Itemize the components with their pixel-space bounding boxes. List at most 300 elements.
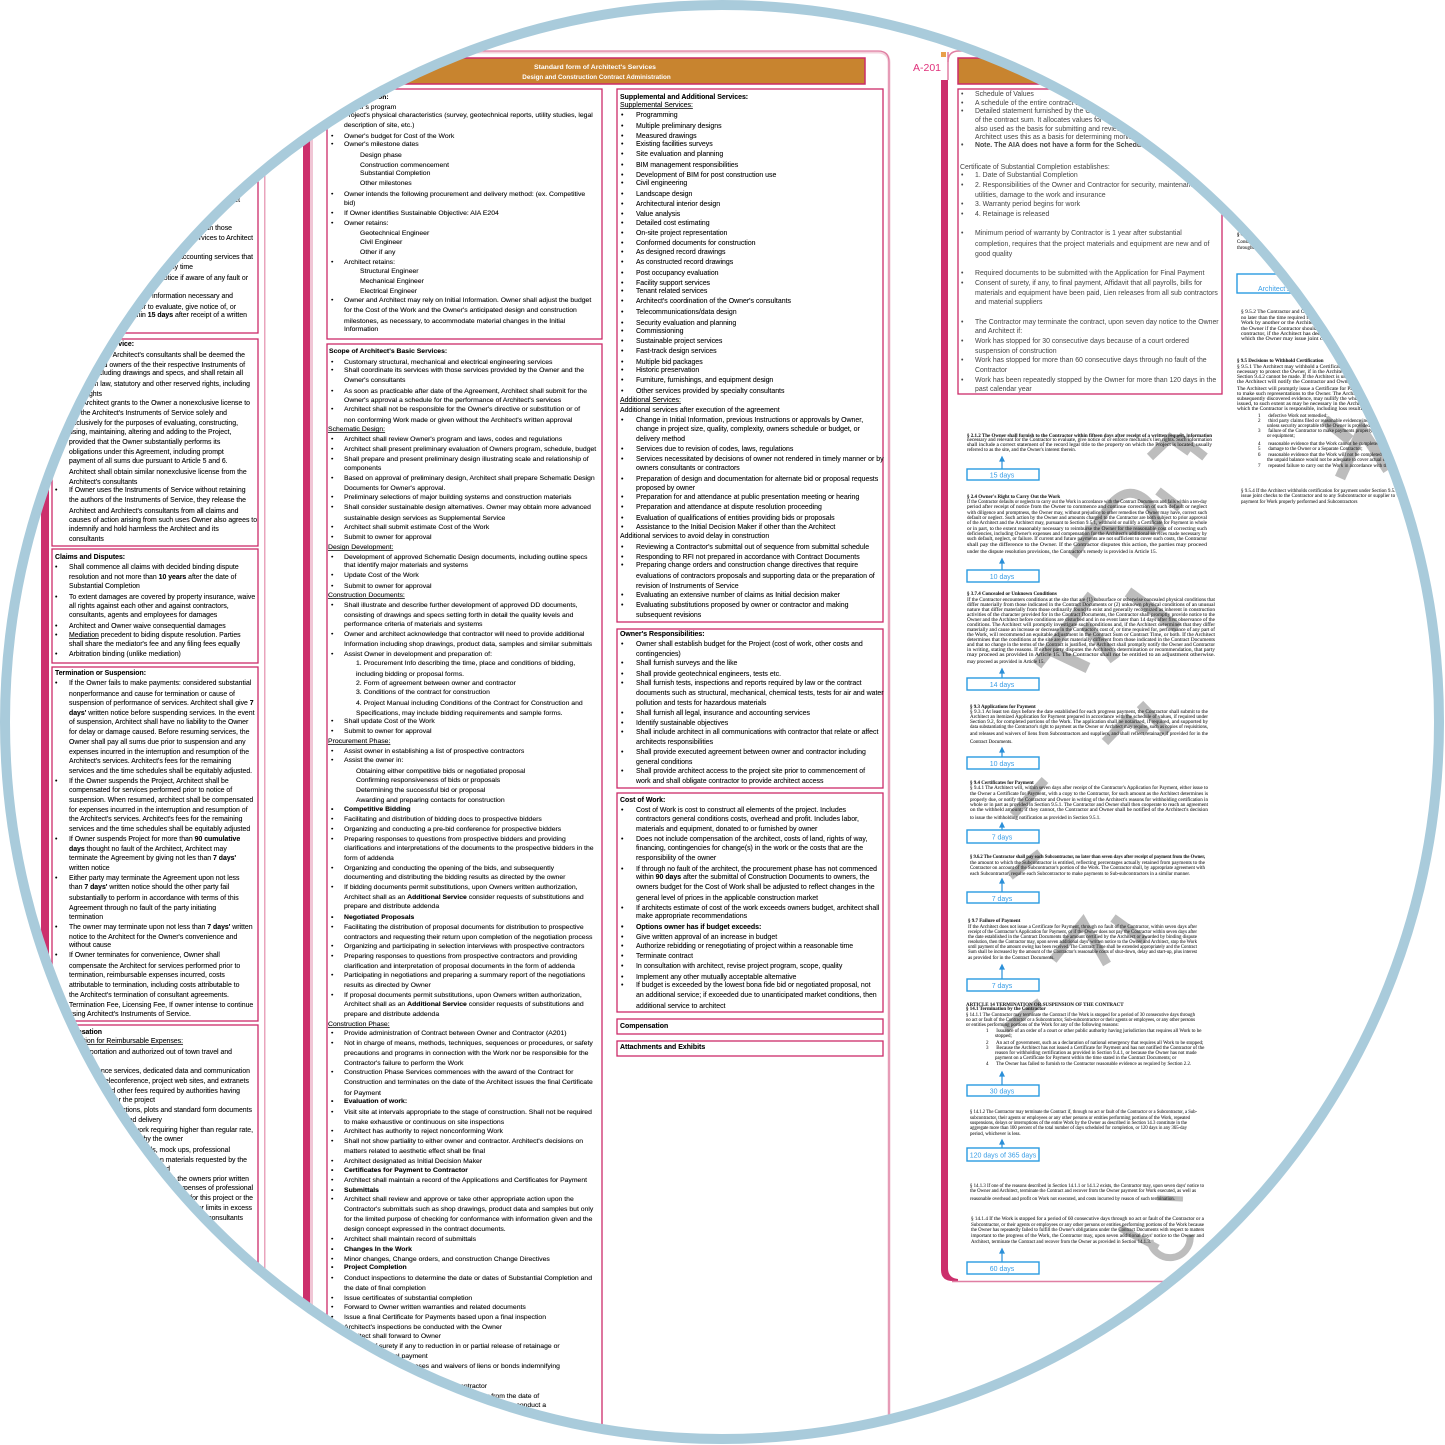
watermark: AIA document marks — [1005, 420, 1388, 1258]
panel: termination or suspension: services and the time schedules shall be equitably adjusted — [69, 826, 250, 833]
clause block: 7 days, subcontractor payments: the amount to which the Subcontractor is entitled, reflecting percentages actually retained from payments to the — [970, 861, 1206, 866]
panel: supplemental and additional services: •Evaluating substitutions proposed by owner or contractor and making — [621, 602, 849, 609]
panel: initial information: Other milestones — [360, 180, 412, 187]
panel: termination or suspension: for delay or damage caused. Before resuming services, the — [69, 729, 250, 736]
panel: termination or suspension: •If the Owner fails to make payments: considered substantial — [55, 680, 252, 687]
panel: supplemental and additional services: •Multiple bid packages — [621, 359, 703, 366]
panel: initial information: Geotechnical Engineer — [360, 230, 430, 237]
clause block: 7 days, certificates for payment: properly due, or notify the Contractor and Owner in writing of the Architect's reasons for withholding certification in — [970, 798, 1208, 803]
panel: supplemental and additional services: •Telecommunications/data design — [621, 309, 737, 316]
far right clauses: 1 defective Work not remedied; — [1258, 414, 1328, 419]
panel: schedule of values and completion notes: Contractor — [975, 367, 1008, 374]
panel: owner's payment obligations (left sheet): Shall provide prompt written notice if aware of any fault or — [73, 275, 249, 282]
panel: scope of architect's basic services: •Conduct inspections to determine the date or dates of Substantial Completion and — [331, 1275, 592, 1282]
panel: supplemental and additional services: Supplemental Services: — [620, 102, 693, 109]
panel: compensation and reimbursable expenses: Expense of overtime work requiring higher than regular rate, — [70, 1127, 253, 1134]
heading: owner's responsibilities: Owner's Responsibilities: — [620, 631, 705, 638]
panel: schedule of values and completion notes: •Work has been repeatedly stopped by the Owner for more than 120 days in the — [961, 377, 1216, 384]
panel: cost of work: within 90 days after the submittal of Construction Documents to owners, the — [635, 874, 869, 881]
panel: termination or suspension: Owner shall pay all sums due prior to suspension and any — [69, 739, 246, 746]
panel: scope of architect's basic services: •If proposal documents permit substitutions, upon Owners written authorization, — [331, 992, 582, 999]
panel: instruments of service: The Architect grants to the Owner a nonexclusive license to — [69, 400, 250, 407]
panel: scope of architect's basic services: •Architect shall present preliminary evaluation of Owners program, schedule, budget — [331, 446, 596, 453]
panel: scope of architect's basic services: clarifications and interpretations of the documents to the prospective bidders in the — [344, 845, 594, 852]
panel: scope of architect's basic services: •Submit to owner for approval — [331, 583, 432, 590]
panel: scope of architect's basic services: Construction Documents: — [328, 592, 405, 599]
heading: compensation: Compensation — [54, 1029, 102, 1036]
panel: supplemental and additional services: •Post occupancy evaluation — [621, 270, 719, 277]
panel: initial information: bid) — [344, 200, 355, 207]
far right clauses: The Architect will promptly issue a Certificate for Payment for the amount for which the Architect is able — [1237, 387, 1445, 392]
panel: supplemental and additional services: evaluations of contractors proposals and supporting data or the preparation of — [636, 573, 875, 580]
panel: initial information: Civil Engineer — [360, 239, 403, 246]
heading: termination or suspension: Termination or Suspension: — [55, 670, 146, 677]
panel: compensation and reimbursable expenses: liability insurance dedicated for this project or the — [104, 1195, 253, 1202]
clause block: 30 days, termination by the contractor: no act or fault of the Contractor or a Subcontractor, Sub-subcontractor or their agents or employees, or any other persons — [966, 1018, 1195, 1023]
panel: compensation and reimbursable expenses: Architect's consultants, with the owners prior written — [91, 1176, 249, 1183]
panel: schedule of values and completion notes: •3. Warranty period begins for work — [961, 201, 1081, 208]
clause block: 10 days, owner's right to carry out the work — [967, 495, 1208, 582]
panel: schedule of values and completion notes: •4. Retainage is released — [961, 211, 1049, 218]
panel: owner's payment obligations (left sheet): Owner shall furnish services of consultants other than those — [50, 225, 232, 232]
panel: scope of architect's basic services: •Customary structural, mechanical and electrical engineering services — [331, 359, 553, 366]
panel: supplemental and additional services: change in project size, quality, complexity, owners schedule or budget, or — [636, 426, 860, 433]
panel: scope of architect's basic services: meeting with Owner to review the facility's performance — [344, 1411, 511, 1418]
panel: termination or suspension: the Architect's services. Architect's fees for the remaining — [69, 816, 243, 823]
panel: termination or suspension: •If Owner suspends Project for more than 90 cumulative — [55, 836, 240, 843]
far right clauses: the unpaid balance would not be adequate to cover actual or liquidated damages; — [1267, 458, 1428, 463]
panel: scope of architect's basic services: •Organizing and conducting the opening of the bids, and subsequently — [331, 865, 555, 872]
panel: scope of architect's basic services: •Issue a final Certificate for Payments based upon a final inspection — [331, 1314, 546, 1321]
panel: termination or suspension: •Either party may terminate the Agreement upon not less — [55, 875, 240, 882]
clause block: 30 days, termination by the contractor: 2 An act of government, such as a declaration of national emergency that requires all Work to be stopped; — [986, 1041, 1203, 1046]
panel: scope of architect's basic services: matters related to aesthetic effect shall be final — [344, 1148, 485, 1155]
panel: scope of architect's basic services: substantial completion. Without additional compensation conduct a — [344, 1402, 546, 1409]
panel: scope of architect's basic services: 2. Form of agreement between owner and contractor — [356, 680, 516, 687]
panel: cost of work: •If budget is exceeded by the lowest bona fide bid or negotiated proposal, not — [621, 982, 871, 989]
clause block: 10 days, owner's right to carry out the work: shall pay the difference to the Owner. If the Contractor disputes this action, the parties may proceed — [967, 543, 1208, 548]
panel: scope of architect's basic services: 4. Project Manual including Conditions of the Contract for Construction and — [356, 700, 583, 707]
panel: initial information: Other if any — [360, 249, 396, 256]
panel: supplemental and additional services: •Change in Initial Information, previous Instructions or approvals by Owner, — [621, 417, 863, 424]
panel: termination or suspension: than 7 days' written notice should the other party fail — [69, 884, 230, 891]
panel: compensation and reimbursable expenses: subsistence — [59, 1058, 95, 1065]
panel: schedule of values and completion notes: •A schedule of the entire contract sum allocated among the parts of the Work — [961, 100, 1207, 107]
panel: schedule of values and completion notes: of the contract sum. It allocates values for the various parts of the Work and is — [975, 117, 1213, 124]
clause block: 14 days, concealed or unknown conditions: and that no change in the terms of the Contract is justified, the Architect shall promptly notify the Owner and Contractor — [967, 643, 1215, 648]
clause block: 15 days: § 2.1.2 The Owner shall furnish to the Contractor within fifteen days after receipt of a written request, information — [967, 434, 1212, 439]
panel: scope of architect's basic services: •Facilitating the distribution of proposal documents for distribution to prospective — [331, 924, 584, 931]
panel: supplemental and additional services: •Civil engineering — [621, 180, 687, 187]
panel: claims and disputes: resolution and not more than 10 years after the date of — [69, 574, 237, 581]
clause block: 14 days, concealed or unknown conditions: determines that the conditions at the site are not materially different from those indicated in the Contract Documents — [967, 638, 1215, 643]
heading: supplemental and additional services: Supplemental and Additional Services: — [620, 94, 748, 101]
far right clauses: subsequently discovered evidence, may nullify the whole or a part of a Certificate for Payment previously — [1237, 397, 1445, 402]
panel: scope of architect's basic services: •Preparing responses to questions from prospective contractors and providing — [331, 953, 577, 960]
panel: supplemental and additional services: •Historic preservation — [621, 367, 699, 374]
clause block: 30 days, termination by the contractor: 1 Issuance of an order of a court or other public authority having jurisdiction that requires all Work to be — [986, 1029, 1202, 1034]
panel: instruments of service: exclusively for the purposes of evaluating, constructing, — [69, 420, 238, 427]
duration box: 7 days — [967, 965, 1039, 991]
panel: owner's payment obligations (left sheet): designated or authorize Architect to furnish services to Architect — [59, 235, 253, 242]
panel: owner's responsibilities: •Identify sustainable objectives — [621, 720, 729, 727]
duration box: 14 days: 14 days — [990, 682, 1015, 689]
panel: supplemental and additional services: •Fast-track design services — [621, 348, 717, 355]
panel: owner's payment obligations (left sheet) — [125, 181, 259, 334]
panel: instruments of service: •If Owner uses the Instruments of Service without retaining — [55, 487, 246, 494]
panel: scope of architect's basic services: •Provide administration of Contract between Owner and Contractor (A201) — [331, 1030, 567, 1037]
panel: compensation and reimbursable expenses: services, teleconference, project web sites, and extranets — [74, 1078, 250, 1085]
panel: supplemental and additional services: •Landscape design — [621, 191, 692, 198]
panel: scope of architect's basic services: •If bidding documents permit substitutions, upon Owners written authorization, — [331, 884, 578, 891]
clause block: 30 days, termination by the contractor: § 14.1.1 The Contractor may terminate the Contract if the Work is stopped for a period of 30 consecutive days through — [966, 1013, 1195, 1018]
panel: initial information: •Owner and Architect may rely on Initial Information. Owner shall adjust the budget — [331, 297, 591, 304]
clause block: 10 days, applications for payment — [967, 705, 1209, 769]
panel: compensation: Compensation — [620, 1023, 668, 1030]
clause block: 10 days, applications for payment: Section 9.2, for completed portions of the Work. The application shall be notarized, if required, and supported by — [970, 720, 1209, 725]
clause block: 14 days, concealed or unknown conditions: may proceed as provided in Article 15. — [967, 660, 1045, 665]
far right clauses: to make such representations to the Owner. The Architect may also withhold a Certificate for Payment or — [1237, 392, 1445, 397]
clause block: 30 days, termination by the contractor: 4 The Owner has failed to furnish to the Contractor reasonable evidence as required by Section 2.2. — [986, 1062, 1191, 1067]
panel: scope of architect's basic services: •Affidavits, receipts, releases and waivers of liens or bonds indemnifying — [331, 1363, 560, 1370]
panel: cost of work: responsibility of the owner — [636, 855, 717, 862]
panel: scope of architect's basic services: 3. Conditions of the contract for construction — [356, 689, 490, 696]
panel: attachments and exhibits — [617, 1041, 883, 1056]
clause block: 30 days, termination by the contractor: reason for withholding certification as provided in Section 9.4.1, or because the Owner has not made — [995, 1051, 1197, 1056]
clause block: seven days' notice: reasonable overhead and profit on Work not executed, and costs incurred by reason of such termination. — [970, 1197, 1175, 1202]
panel: termination or suspension: Architect's services. Architect's fees for the remaining — [69, 758, 231, 765]
clause block: 14 days, concealed or unknown conditions: may proceed as provided in Article 15. The Contractor shall not be entitled to an adjustment otherwise. — [967, 653, 1215, 658]
panel: schedule of values and completion notes: •Required documents to be submitted with the Application for Final Payment — [961, 270, 1205, 277]
panel: claims and disputes: •Arbitration binding (unlike mediation) — [55, 651, 181, 658]
panel: instruments of service: indemnify and hold harmless the Architect and its — [69, 526, 219, 533]
clause block: 120 days of 365 days: period, whichever is less. — [970, 1132, 1021, 1137]
panel: supplemental and additional services: •Programming — [621, 112, 678, 119]
panel: scope of architect's basic services: precautions and programs in connection with the Work nor be responsible for the — [344, 1050, 589, 1057]
panel: scope of architect's basic services: •Architect shall forward to Owner — [331, 1333, 442, 1340]
panel: compensation and reimbursable expenses: approval; Architect's expenses of professional — [113, 1185, 253, 1192]
panel: scope of architect's basic services: •Submittals — [331, 1187, 379, 1194]
header: A-201 sheet — [957, 57, 1040, 85]
panel: cost of work: •If architects estimate of cost of the work exceeds owners budget, architect shall — [621, 905, 880, 912]
panel: instruments of service: copyrights — [71, 391, 103, 398]
panel: scope of architect's basic services: Contractor's submittals such as shop drawings, product data and samples but only — [344, 1206, 594, 1213]
panel: scope of architect's basic services: •Evaluation of work: — [331, 1098, 407, 1105]
panel: scope of architect's basic services: components — [344, 465, 382, 472]
panel: owner's payment obligations (left sheet): enforce lien rights within 15 days after receipt of a written — [72, 312, 247, 319]
panel: scope of architect's basic services: Procurement Phase: — [328, 738, 390, 745]
clause block: 7 days, failure of payment: If the Architect does not issue a Certificate for Payment, through no fault of the Contractor, within seven days after — [968, 925, 1197, 930]
panel: scope of architect's basic services: •Preliminary selections of major building systems and construction materials — [331, 494, 572, 501]
panel: scope of architect's basic services: •Shall update Cost of the Work — [331, 718, 435, 725]
panel: supplemental and additional services: •Architectural interior design — [621, 201, 720, 208]
panel: supplemental and additional services — [617, 89, 884, 622]
panel: compensation and reimbursable expenses: Long distance services, dedicated data and communication — [69, 1068, 250, 1075]
clause block: 15 days — [967, 434, 1213, 480]
panel: instruments of service: consultants — [69, 536, 104, 543]
clause block: 7 days, certificates for payment: § 9.4 Certificates for Payment — [970, 781, 1034, 786]
panel: supplemental and additional services: •Existing facilities surveys — [621, 141, 713, 148]
panel: scope of architect's basic services: •Owner shall give notice within a period of 1 year from the date of — [331, 1393, 539, 1400]
panel: scope of architect's basic services: Owner's consultants — [344, 377, 406, 384]
panel: owner's responsibilities: architects responsibilities — [636, 739, 714, 746]
panel: claims and disputes: Substantial Completion — [69, 583, 140, 590]
panel: termination or suspension: terminate the Agreement by giving not les than 7 days' — [69, 855, 236, 862]
panel: owner's responsibilities: •Shall furnish all legal, insurance and accounting services — [621, 710, 810, 717]
panel: initial information: Design phase — [360, 152, 402, 159]
panel: compensation and reimbursable expenses: if authorized in advance by the owner — [69, 1136, 184, 1143]
panel: initial information: Mechanical Engineer — [360, 278, 425, 285]
panel: supplemental and additional services: •As designed record drawings — [621, 249, 726, 256]
panel: scope of architect's basic services: •Project Completion — [331, 1264, 407, 1271]
panel: initial information: Information — [344, 326, 378, 333]
panel: supplemental and additional services: •Security evaluation and planning — [621, 320, 736, 327]
panel: termination or suspension: suspension. When resumed, architect shall be compensated — [69, 797, 253, 804]
panel: supplemental and additional services: proposed by owner — [636, 485, 696, 492]
clause block: 14 days, concealed or unknown conditions: in writing, stating the reasons. If either party disputes the Architect's determination or recommendation, that party — [967, 648, 1216, 653]
panel: initial information: Structural Engineer — [360, 268, 419, 275]
panel: attachments and exhibits: Attachments and Exhibits — [620, 1044, 705, 1051]
panel: supplemental and additional services: •On-site project representation — [621, 230, 728, 237]
clause block: 10 days, applications for payment: § 9.3 Applications for Payment — [970, 705, 1036, 710]
clause block: 7 days, failure of payment: as provided for in the Contract Documents. — [968, 956, 1055, 961]
panel: scope of architect's basic services: •Development of approved Schematic Design documents, including outline specs — [331, 554, 588, 561]
far right clauses: necessary to protect the Owner, if in the Architect's opinion the representations to the Owner required by — [1237, 370, 1445, 375]
panel: cost of work: additional service to architect — [636, 1003, 726, 1010]
panel: initial information: Electrical Engineer — [360, 288, 418, 295]
panel: scope of architect's basic services: for Payment — [344, 1090, 381, 1097]
panel: termination or suspension: days' written notice before suspending services. In the event — [69, 710, 255, 717]
clause block: 120 days of 365 days — [967, 1110, 1197, 1161]
far right clauses: Work by another or the Architect's Certificate for Payment with respect to the remaining portions of — [1241, 321, 1445, 326]
clause block: 60 days, work stopped — [967, 1217, 1205, 1274]
clause block: 7 days, certificates for payment: to issue the withholding notification as provided in Section 9.5.1. — [970, 816, 1101, 821]
panel: scope of architect's basic services: •Minor changes, Change orders, and construction Change Directives — [331, 1256, 550, 1263]
panel: scope of architect's basic services: Specifications, may include bidding requirements and sample forms. — [356, 710, 563, 717]
panel: instruments of service — [46, 339, 258, 546]
panel: termination or suspension: substantially to perform in accordance with terms of this — [69, 895, 239, 902]
panel: initial information: Substantial Completion — [360, 170, 431, 177]
clause block: 10 days, owner's right to carry out the work: § 2.4 Owner's Right to Carry Out the Work — [967, 495, 1060, 500]
header: Standard form of Architect's Services — [404, 57, 866, 85]
far right clauses: payment for Work properly performed and Subcontractors — [1241, 500, 1357, 505]
panel: owner's responsibilities: contingencies) — [636, 651, 681, 658]
panel: scope of architect's basic services: •Architect shall review Owner's program and laws, codes and regulations — [331, 436, 563, 443]
panel: scope of architect's basic services: •Submit to owner for approval — [331, 534, 432, 541]
clause block: 7 days, failure of payment — [967, 919, 1198, 991]
far right clauses: which the Owner may issue joint checks and pay directly to the Contractor any retainage then due — [1241, 337, 1445, 342]
clause block: 30 days, termination by the contractor: or entities performing portions of the Work for any of the following reasons: — [966, 1023, 1119, 1028]
clause block: 10 days, applications for payment: § 9.3.1 At least ten days before the date established for each progress payment, the Contractor shall submit to the — [970, 710, 1209, 715]
clause block: 7 days, subcontractor payments: § 9.6.2 The Contractor shall pay each Subcontractor, no later than seven days after receipt of payment from the Owner, — [970, 855, 1206, 860]
panel: termination or suspension: nonperformance and cause for termination or cause of — [69, 691, 235, 698]
panel: supplemental and additional services: •Facility support services — [621, 280, 711, 287]
panel: scope of architect's basic services: •Preparing responses to questions from prospective bidders and providing — [331, 836, 566, 843]
panel: termination or suspension: Termination Fee, Licensing Fee, If owner intense to continue — [69, 1002, 253, 1009]
far right clauses: contractor, if the Architect has decided to withhold or nullify a Certificate for Payment as a result of — [1241, 332, 1445, 337]
panel: compensation and reimbursable expenses: Renderings, models, mock ups, professional — [94, 1147, 230, 1154]
clause block: 14 days, concealed or unknown conditions: the Work, will recommend an equitable adjustment in the Contract Sum or Contract Time, or both. If the Architect — [967, 633, 1216, 638]
panel: scope of architect's basic services: consisting of drawings and specs setting forth in detail the quality levels and — [344, 612, 574, 619]
panel: scope of architect's basic services: Information including shop drawings, product data, samples and similar submittals — [344, 641, 593, 648]
panel: cost of work: financing, contingencies for change(s) in the work or the costs that are the — [636, 845, 863, 852]
panel: scope of architect's basic services: •Organizing and conducting a pre-bid conference for prospective bidders — [331, 826, 562, 833]
panel: scope of architect's basic services: •Shall illustrate and describe further development of approved DD documents, — [331, 602, 578, 609]
clause block: 14 days, concealed or unknown conditions — [967, 592, 1216, 690]
panel: scope of architect's basic services: •Construction Phase Services commences with the award of the Contract for — [331, 1069, 574, 1076]
clause block: 7 days, certificates for payment — [967, 781, 1209, 843]
panel: cost of work: •In consultation with architect, revise project program, scope, quality — [621, 963, 843, 970]
clause block: 10 days, owner's right to carry out the work: If the Contractor defaults or neglects to carry out the Work in accordance with the Contract Documents and fails within a ten-day — [967, 500, 1207, 505]
panel: schedule of values and completion notes: past calendar year — [975, 386, 1032, 393]
clause block: 60 days, work stopped: § 14.1.4 If the Work is stopped for a period of 60 consecutive days through no act or fault of the Contractor or a — [971, 1217, 1205, 1222]
clause block: 7 days, subcontractor payments — [967, 855, 1206, 903]
panel: cost of work: •Authorize rebidding or renegotiating of project within a reasonable time — [621, 943, 853, 950]
panel: initial information: milestones, as necessary, to accommodate material changes in the Initial — [344, 318, 566, 325]
panel: scope of architect's basic services: •Issue certificates of substantial completion — [331, 1295, 472, 1302]
panel: scope of architect's basic services: results as directed by Owner — [344, 982, 431, 989]
clause block: seven days' notice: the Owner and Architect, terminate the Contract and recover from the Owner payment for Work executed, as well as — [970, 1189, 1196, 1194]
panel: scope of architect's basic services: Contractor's failure to perform the Work — [344, 1060, 464, 1067]
clause block: 10 days, owner's right to carry out the work: such default, neglect, or failure. If current and future payments are not sufficient to cover such costs, the Contractor — [967, 537, 1207, 542]
clause block: 7 days, certificates for payment: on the withheld amount; if they cannot, the Contractor and Owner shall be notified of the Architect's decision — [970, 808, 1209, 813]
panel: schedule of values and completion notes: also used as the basis for submitting and reviewing progress payments. The — [975, 126, 1207, 133]
clause block: 7 days, certificates for payment: the Owner a Certificate for Payment, with a copy to the Contractor, for such amount as the Architect determines is — [970, 792, 1208, 797]
panel: scope of architect's basic services: contractors and requesting their return upon completion of the negotiation process — [344, 934, 593, 941]
panel: supplemental and additional services: subsequent revisions — [636, 612, 702, 619]
panel: supplemental and additional services: •As constructed record drawings — [621, 259, 734, 266]
panel: owner's responsibilities: •Shall include architect in all communications with contractor that relate or affect — [621, 729, 878, 736]
panel: initial information: •Owner's milestone dates — [331, 141, 419, 148]
duration box: 30 days: 30 days — [990, 1088, 1015, 1096]
panel: initial information: •Owner retains: — [331, 220, 389, 227]
panel: initial information: •Architect retains: — [331, 259, 395, 266]
panel: termination or suspension: compensate the Architect for services performed prior to — [69, 963, 240, 970]
clause block: 120 days of 365 days: subcontractor, their agents or employees or any other persons or entities performing portions of the Work, repeated — [970, 1116, 1190, 1121]
clause block: 60 days, work stopped: the Owner has repeatedly failed to fulfill the Owner's obligations under the Contract Documents with respect to matters — [971, 1228, 1204, 1233]
panel: compensation and reimbursable expenses — [77, 1024, 259, 1263]
clause block: 10 days, owner's right to carry out the work: deficiencies, including Owner's expenses and compensation for the Architect's additional services made necessary by — [967, 532, 1208, 537]
clause block: 120 days of 365 days: aggregate more than 100 percent of the total number of days scheduled for completion, or 120 days in any 365-day — [970, 1126, 1187, 1131]
panel: supplemental and additional services: •Preparing change orders and construction change directives that require — [621, 562, 858, 569]
far right clauses: 7 repeated failure to carry out the Work in accordance with the Contract Documents. — [1258, 464, 1433, 469]
clause block: 10 days, owner's right to carry out the work: under the dispute resolution provisions, the Contractor's remedy is provided in Article 15. — [967, 550, 1157, 555]
panel: scope of architect's basic services: •Shall not show partiality to either owner and contractor. Architect's decisions on — [331, 1138, 583, 1145]
clause block: 120 days of 365 days: suspensions, delays or interruptions of the entire Work by the Owner as described in Section 14.3 constitute in the — [970, 1121, 1188, 1126]
panel: initial information: •If Owner identifies Sustainable Objective: AIA E204 — [331, 210, 499, 217]
panel: scope of architect's basic services: •Assist the owner in: — [331, 757, 403, 764]
panel: scope of architect's basic services: Documents for Owner's approval. — [344, 485, 445, 492]
clause block: 7 days, subcontractor payments: Contractor on account of the Subcontractor's portion of the Work. The Contractor shall, by appropriate agreement with — [970, 866, 1205, 871]
clause block: 30 days, termination by the contractor — [966, 1003, 1205, 1096]
duration box: 7 days: 7 days — [992, 896, 1013, 903]
panel: termination or suspension: for expenses incurred in the interruption and resumption of — [69, 807, 248, 814]
panel: supplemental and additional services: •Conformed documents for construction — [621, 240, 756, 247]
panel: initial information: description of site, etc.) — [344, 122, 414, 129]
clause block: 7 days, subcontractor payments: each Subcontractor, require each Subcontractor to make payments to Sub-subcontractors in a similar manner. — [970, 872, 1190, 877]
panel: supplemental and additional services: •Detailed cost estimating — [621, 220, 710, 227]
panel: supplemental and additional services: •Preparation of design and documentation for alternate bid or proposal requests — [621, 476, 879, 483]
panel: scope of architect's basic services: •Architect's inspections be conducted with the Owner — [331, 1324, 503, 1331]
panel: supplemental and additional services: •BIM management responsibilities — [621, 162, 739, 169]
clause block: 10 days, owner's right to carry out the work: period after receipt of notice from the Owner to commence and continue correction of such default or neglect — [967, 505, 1208, 510]
panel: scope of architect's basic services: •Facilitating and distribution of bidding docs to prospective bidders — [331, 816, 542, 823]
far right clauses: the Architect will notify the Contractor and Owner as provided in Section 9.4.1. If the Contractor and — [1237, 380, 1445, 385]
panel: termination or suspension: without cause — [68, 942, 111, 949]
panel: owner's responsibilities: documents such as structural, mechanical, chemical tests, tests for air and water — [636, 690, 884, 697]
clause block: 14 days, concealed or unknown conditions: materially and cause an increase or decrease in the Contractor's cost of, or time required for, performance of any part of — [967, 628, 1215, 633]
panel: compensation — [617, 1019, 883, 1034]
panel: scope of architect's basic services: •Certificates for Payment to Contractor — [331, 1167, 468, 1174]
panel: supplemental and additional services: •Architect's coordination of the Owner's consultants — [621, 298, 791, 305]
panel: supplemental and additional services: •Site evaluation and planning — [621, 151, 723, 158]
panel: scope of architect's basic services: •As soon as practicable after date of the Agreement, Architect shall submit for the — [331, 388, 587, 395]
panel: supplemental and additional services: •Measured drawings — [621, 133, 697, 140]
panel: scope of architect's basic services: •Owner and architect acknowledge that contractor will need to provide additional — [331, 631, 585, 638]
far right clauses: issued, to such extent as may be necessary in the Architect's opinion to protect the Owner from loss for — [1237, 402, 1445, 407]
panel: compensation and reimbursable expenses: jurisdiction over the project — [72, 1097, 155, 1104]
panel: scope of architect's basic services: Design Development: — [328, 544, 394, 551]
panel: cost of work: •If through no fault of the architect, the procurement phase has not commenced — [621, 866, 877, 873]
panel: scope of architect's basic services: Owner's approval a schedule for the performance of Architect's services — [344, 397, 562, 404]
panel: compensation and reimbursable expenses: Printing, reproductions, plots and standard form documents — [71, 1107, 253, 1114]
panel: claims and disputes: • Mediation precedent to biding dispute resolution. Parties — [55, 632, 241, 639]
panel: initial information: •Owner's program — [331, 104, 397, 111]
panel: schedule of values and completion notes: •Consent of surety, if any, to final payment, Affidavit that all payrolls, bills for — [961, 280, 1203, 287]
panel: owner's payment obligations (left sheet): those services which the Owner requires of Architect as set — [60, 197, 240, 204]
clause block: seven days' notice: § 14.1.3 If one of the reasons described in Section 14.1.1 or 14.1.2 exists, the Contractor may, upon seven days' notice to — [970, 1184, 1204, 1189]
panel: scope of architect's basic services — [327, 344, 602, 1445]
clause block: 10 days, applications for payment: and releases and waivers of liens from Subcontractors and suppliers, and shall reflect retainage if provided for in the — [970, 732, 1209, 737]
panel: scope of architect's basic services: Schematic Design: — [328, 426, 385, 433]
panel: owner's responsibilities — [617, 629, 884, 788]
page frame: A-201 sheet — [941, 50, 1164, 1282]
far right clauses: § 4.2 — [1237, 233, 1248, 238]
panel: scope of architect's basic services: •Architect has authority to reject nonconforming Work — [331, 1128, 503, 1135]
clause block: 10 days, applications for payment: Contract Documents. — [970, 740, 1012, 745]
panel: supplemental and additional services: •Preparation for and attendance at public presentation meeting or hearing — [621, 494, 859, 501]
panel: compensation and reimbursable expenses: owner or required — [116, 1166, 170, 1173]
panel: scope of architect's basic services: documenting and distributing the bidding results as directed by the owner — [344, 874, 566, 881]
clause block: 7 days, failure of payment: the date established in the Contract Documents the amount certified by the Architect or awarded by binding dispute — [968, 935, 1198, 940]
panel: schedule of values and completion notes — [958, 89, 1222, 394]
duration box: monthly, architect: Architect's Certificate for Payment — [1258, 286, 1363, 293]
panel: supplemental and additional services: •Value analysis — [621, 211, 681, 218]
panel: scope of architect's basic services: clarification and interpretation of proposal documents in the form of addenda — [344, 963, 575, 970]
panel: supplemental and additional services: •Development of BIM for post construction use — [621, 172, 777, 179]
panel: initial information: •Owner's budget for Cost of the Work — [331, 133, 455, 140]
panel: supplemental and additional services: •Commissioning — [621, 328, 684, 335]
panel: termination or suspension: •The owner may terminate upon not less than 7 days' written — [55, 924, 253, 931]
far right clauses: which the Contractor is responsible, including loss resulting from acts and omissions described in Section — [1237, 407, 1445, 412]
panel: scope of architect's basic services: prepare and distribute addenda — [344, 903, 439, 910]
clause block: 15 days: necessary and relevant for the Contractor to evaluate, give notice of or enforce mechanic's lien rights. Such information — [967, 438, 1213, 443]
panel: scope of architect's basic services: that identify major materials and systems — [344, 562, 469, 569]
panel: termination or suspension: written notice — [68, 865, 110, 872]
duration box: 15 days: 15 days — [990, 472, 1015, 480]
panel: scope of architect's basic services: including bidding or proposal forms. — [356, 671, 464, 678]
panel: termination or suspension: of suspension, Architect shall have no liability to the Owner — [69, 719, 249, 726]
panel: scope of architect's basic services: Architect shall as an Additional Service consider requests of substitutions and — [344, 1001, 584, 1008]
panel: termination or suspension: services and the time schedules shall be equitably adjusted. — [69, 768, 252, 775]
panel: scope of architect's basic services: prepare and distribute addenda — [344, 1011, 439, 1018]
panel: schedule of values and completion notes: suspension of construction — [975, 348, 1057, 355]
panel: cost of work — [617, 793, 883, 1012]
panel: owner's responsibilities: pollution and tests for hazardous materials — [636, 700, 767, 707]
panel: scope of architect's basic services: •Architect designated as Initial Decision Maker — [331, 1158, 483, 1165]
clause block: 7 days, failure of payment: resolution, then the Contractor may, upon seven additional days' written notice to the Owner and Architect, stop the Work — [968, 940, 1197, 945]
panel: cost of work: owners budget for the Cost of Work shall be adjusted to reflect changes in the — [636, 884, 875, 891]
